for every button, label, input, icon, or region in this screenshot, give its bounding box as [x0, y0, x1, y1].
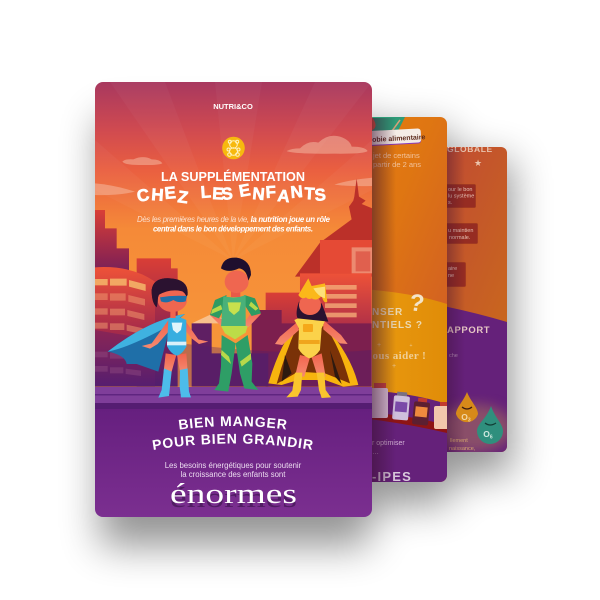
mask [160, 296, 187, 302]
sun rays [95, 82, 372, 260]
hero girl in blue, zoomed units [108, 278, 208, 398]
building: far left stack [95, 210, 129, 293]
sparkles: + [392, 363, 396, 370]
sunset sky [95, 82, 372, 402]
note box three: ne [448, 273, 454, 279]
shadow of main card on pages behind [372, 118, 396, 482]
intro text: partir de 2 ans [373, 160, 421, 169]
building: centre left block [137, 258, 178, 387]
note box one: s. [448, 200, 453, 206]
supporting text: la croissance des enfants sont [181, 470, 286, 479]
head and hair [152, 278, 188, 307]
neck and head [231, 288, 240, 297]
sparkles [377, 342, 412, 368]
question heading: NTIELS ? [372, 320, 423, 331]
legs [295, 353, 326, 377]
middle page [372, 117, 447, 482]
purple wave section [447, 306, 507, 452]
brand: NUTRI&CO [213, 102, 253, 111]
supporting text: Les besoins énergétiques pour soutenir [165, 461, 302, 470]
drop: omega 6: O [483, 429, 490, 439]
arms [210, 308, 261, 327]
intro text: jet de certains [372, 151, 420, 160]
star: ★ [474, 158, 482, 168]
note box one [447, 184, 476, 208]
note box two: u maintien [448, 228, 473, 234]
pale hill [192, 314, 235, 323]
title line one: LA SUPPLÉMENTATION [161, 169, 305, 184]
boots [286, 373, 331, 398]
front page [95, 82, 372, 517]
cloud: left [122, 157, 162, 165]
subtitle: central dans le bon développement des enfants. [153, 224, 313, 234]
question mark: ? [408, 289, 426, 318]
soft cast shadow under the stack [100, 118, 512, 546]
yellow cape lining [268, 325, 358, 387]
back page heading: GLOBALE [447, 144, 493, 154]
city skyline, zoomed units [95, 178, 375, 387]
crown hair [298, 278, 327, 303]
lower text: … [372, 449, 379, 456]
sparkles: + [410, 343, 413, 349]
hair [221, 258, 251, 281]
apport heading: APPORT [447, 325, 490, 336]
product bottles [370, 383, 450, 429]
slogan line two: POUR BIEN GRANDIR [152, 434, 312, 450]
note box three [447, 262, 466, 287]
help line: ous aider ! [372, 350, 426, 362]
building: right mid [266, 293, 302, 387]
apport text: che [449, 353, 458, 359]
big word: énormes [170, 478, 297, 510]
brown cape [277, 326, 350, 384]
glow behind drops [447, 400, 507, 452]
shadow of middle page on back page [447, 148, 465, 452]
note box two: normale. [449, 235, 471, 241]
question heading: NSER [372, 307, 403, 318]
food illustration [370, 117, 405, 131]
drop: omega 3: 3 [468, 418, 471, 424]
purple lower section [372, 392, 447, 482]
blue cape [108, 314, 185, 372]
building: round tower with windows [95, 267, 155, 387]
slogan line one: BIEN MANGER [178, 416, 286, 430]
subtitle [137, 215, 331, 234]
tower with spire [295, 178, 373, 277]
category label: obie alimentaire [372, 134, 426, 144]
subtitle: Dès les premières heures de la vie, la nutrition joue un rôle [137, 215, 331, 224]
cloud: lower left [95, 183, 135, 195]
legs [164, 353, 188, 372]
drop: omega 3 [456, 392, 478, 424]
lower text: naissance, [449, 446, 476, 452]
hair [297, 302, 328, 322]
torso [221, 295, 246, 327]
category label [372, 128, 426, 146]
arms [142, 319, 208, 349]
big word shadow: énormes [170, 482, 297, 514]
lower text: r optimiser [372, 440, 405, 447]
recipes heading: -IPES [372, 469, 412, 484]
hero boy in green, zoomed units [210, 258, 261, 392]
building: right with window bands [300, 273, 372, 387]
legs [214, 335, 258, 392]
note box one: our le bon [448, 187, 472, 193]
back page [447, 147, 507, 452]
suit [167, 317, 186, 356]
purple lower panel [95, 409, 372, 517]
sparkles: + [377, 342, 381, 349]
lower text: llement [450, 438, 468, 444]
cloud: lower right [334, 178, 373, 186]
hero girl in yellow, zoomed units [268, 278, 358, 398]
building: right upper [320, 240, 375, 273]
cloud: upper right [287, 136, 368, 154]
clouds, sky group in zoomed units [95, 136, 373, 195]
yellow wave section [372, 290, 447, 402]
building: low centre right [252, 310, 372, 387]
note box three: aire [448, 266, 457, 272]
dark shelf band [372, 414, 447, 433]
drop: omega 6 [477, 406, 503, 444]
ground deck [95, 387, 372, 409]
infographic: stack of three booklet pages [74, 82, 538, 572]
torso [294, 316, 326, 358]
note box one: lu système [448, 194, 474, 200]
boots [158, 368, 191, 398]
drop: omega 3: O [461, 412, 468, 422]
arms [275, 320, 348, 345]
drop: omega 6: 6 [490, 434, 493, 440]
teddy bear badge [222, 137, 245, 159]
note box two [447, 223, 478, 244]
title line two: CHEZ LES ENFANTS [135, 180, 327, 207]
head [299, 295, 321, 315]
